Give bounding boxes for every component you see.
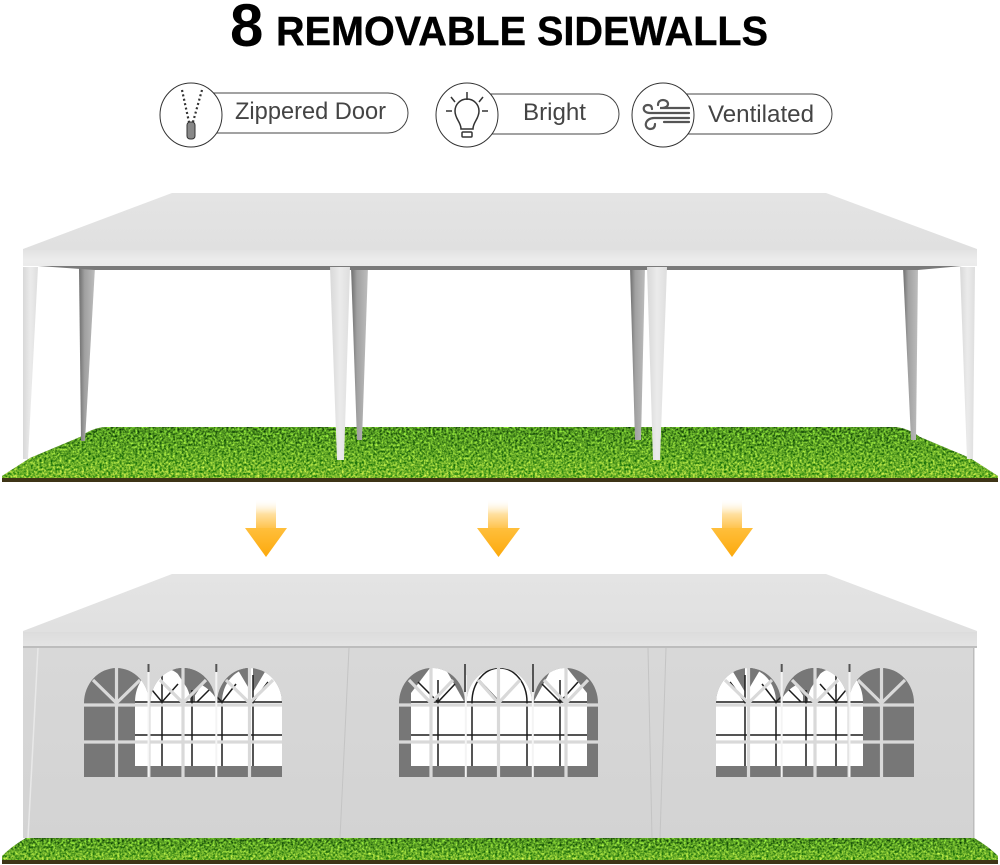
feature badge: bright: Bright xyxy=(523,99,586,126)
valance xyxy=(23,250,977,266)
title xyxy=(230,0,768,59)
grass lawn: bottom xyxy=(2,838,998,864)
arrow middle xyxy=(477,499,520,557)
front poles xyxy=(23,267,975,460)
window: right panel xyxy=(716,664,914,779)
wall xyxy=(23,646,974,838)
title: REMOVABLE SIDEWALLS xyxy=(276,8,768,54)
feature badge: zippered door xyxy=(160,83,408,147)
feature badge: ventilated: Ventilated xyxy=(708,101,814,128)
icon: zipper xyxy=(182,90,202,139)
icon: wind xyxy=(644,100,689,129)
roof xyxy=(23,193,977,250)
feature badge: ventilated xyxy=(632,83,832,147)
grass lawn: top xyxy=(2,427,998,482)
back poles xyxy=(79,267,918,441)
arrow left xyxy=(245,499,287,557)
arrows xyxy=(245,499,753,557)
valance xyxy=(23,632,977,646)
feature badge: zippered door: Zippered Door xyxy=(235,98,386,125)
enclosed tent with sidewalls xyxy=(2,574,998,864)
under-roof shadow xyxy=(38,266,962,270)
window: left panel xyxy=(84,664,282,779)
icon: light bulb xyxy=(446,92,488,137)
open tent without sidewalls xyxy=(2,193,998,482)
arrow right xyxy=(711,499,753,557)
window: middle panel xyxy=(399,664,598,779)
feature badge: bright xyxy=(436,83,619,147)
roof xyxy=(23,574,977,632)
